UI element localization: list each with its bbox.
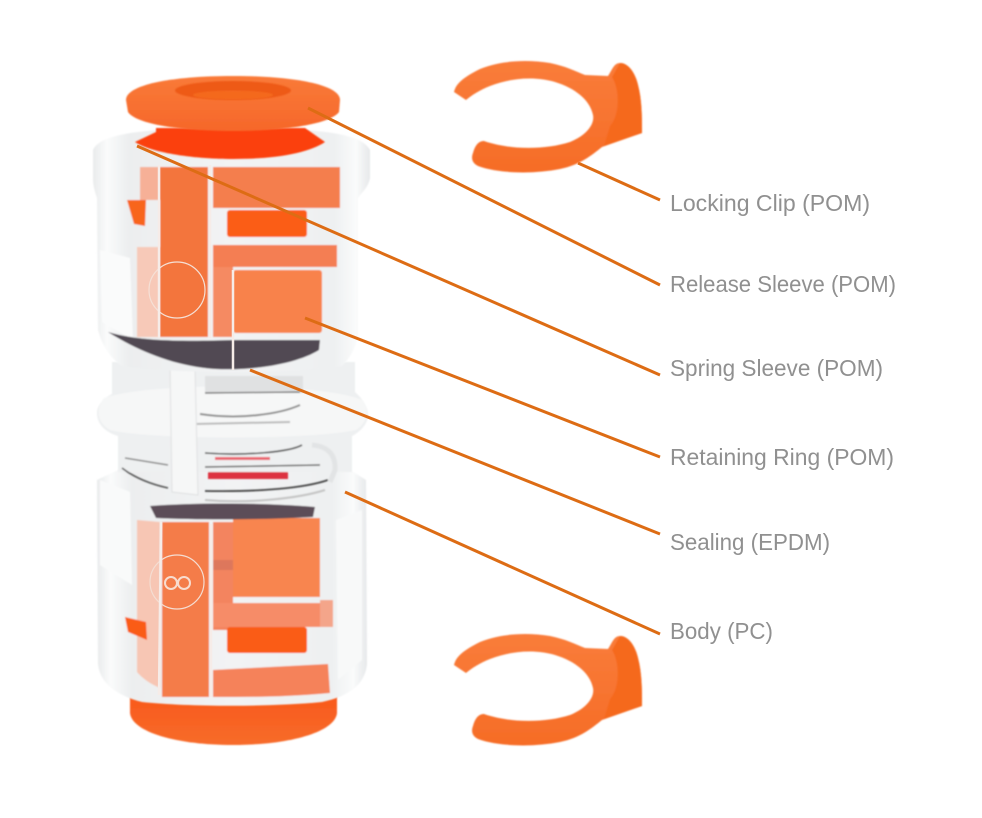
emblem circle on upper body	[149, 262, 205, 318]
white glass ribs	[159, 165, 233, 697]
bottom orange flange	[130, 690, 337, 745]
upper transparent body	[93, 128, 370, 372]
line: sealing	[250, 370, 660, 534]
label: Retaining Ring: Retaining Ring (POM)	[670, 444, 894, 470]
label: Locking Clip: Locking Clip (POM)	[670, 190, 870, 216]
label: Sealing: Sealing (EPDM)	[670, 529, 830, 555]
label: Body: Body (PC)	[670, 618, 773, 644]
leader lines	[137, 108, 660, 634]
line: body	[345, 492, 660, 634]
middle transparent coupling	[97, 362, 368, 501]
label: Spring Sleeve: Spring Sleeve (POM)	[670, 355, 883, 381]
line: locking clip	[578, 163, 660, 200]
lower transparent body	[97, 470, 367, 706]
centre hole	[175, 81, 291, 100]
line: spring sleeve	[137, 146, 660, 375]
top orange flange	[126, 76, 340, 131]
line: release sleeve	[308, 108, 660, 285]
connector product photo	[93, 76, 370, 745]
locking clip bottom	[454, 634, 642, 745]
label: Release Sleeve: Release Sleeve (POM)	[670, 271, 896, 297]
line: retaining ring	[305, 318, 660, 457]
red neck of release sleeve	[135, 128, 325, 159]
locking clip top	[454, 61, 642, 172]
lower body emblem	[150, 555, 204, 609]
